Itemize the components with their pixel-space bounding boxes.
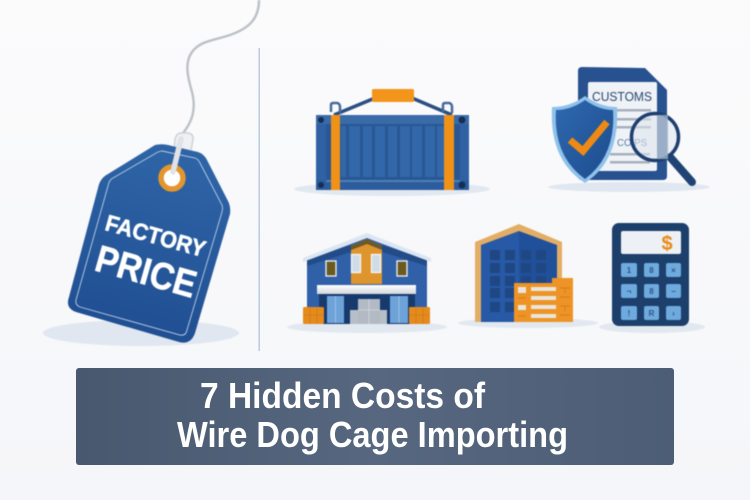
- tag label: [90, 210, 209, 307]
- icon: customs documents, shield and magnifier: CUSTOMS: [592, 90, 652, 104]
- icon: calculator: 8: [649, 287, 654, 296]
- tag eyelet: [161, 139, 183, 189]
- icon: calculator: ›: [672, 309, 675, 318]
- icon: calculator: $: [661, 233, 673, 255]
- magnifier: [632, 114, 692, 182]
- icon: factory price tag: [43, 0, 259, 346]
- icon: calculator: ×: [671, 266, 676, 275]
- title banner: [76, 368, 674, 465]
- icon: warehouse: [287, 233, 447, 333]
- divider: [258, 48, 260, 351]
- title line 1: 7 Hidden Costs of: [200, 375, 486, 416]
- icon: factory building: [458, 224, 598, 328]
- icon: calculator: !: [628, 309, 630, 318]
- icon: customs documents, shield and magnifier: [548, 67, 710, 192]
- icon: calculator: 1: [627, 266, 632, 275]
- tag label: FACTORY: [103, 210, 209, 262]
- icon: customs documents, shield and magnifier: COIPS: [617, 138, 647, 149]
- icon: shipping container: [294, 89, 490, 196]
- icon: calculator: ¬: [627, 287, 632, 296]
- icon: calculator: R: [649, 309, 655, 318]
- tag label: PRICE: [90, 238, 201, 307]
- shield with check: [552, 96, 617, 183]
- icon: calculator: [599, 223, 705, 333]
- title line 2: Wire Dog Cage Importing: [177, 414, 568, 455]
- icon: calculator: −: [671, 287, 676, 296]
- icon: calculator: 8: [649, 266, 654, 275]
